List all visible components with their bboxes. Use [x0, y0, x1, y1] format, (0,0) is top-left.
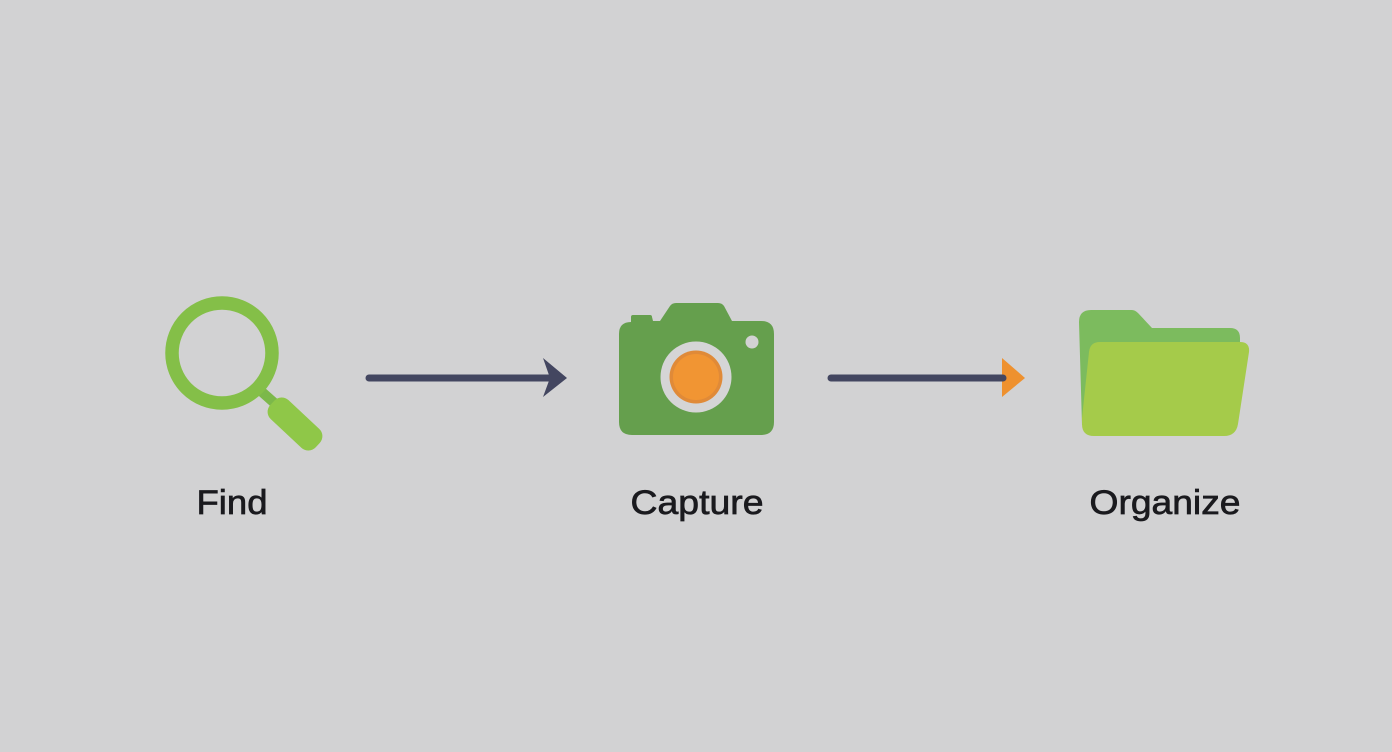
- arrow: capture to organize: [831, 358, 1025, 397]
- arrow: find to capture: [369, 358, 567, 397]
- icon: camera: [619, 303, 774, 435]
- label: Organize: Organize: [1090, 484, 1240, 522]
- icon: magnifying glass: [172, 303, 327, 455]
- icon: folder: [1079, 310, 1249, 436]
- label: Capture: Capture: [630, 484, 764, 522]
- label: Find: Find: [196, 484, 268, 522]
